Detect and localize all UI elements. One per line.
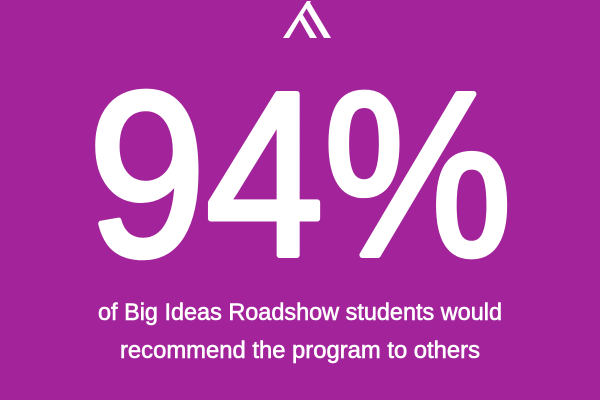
icon: logo	[283, 1, 331, 38]
caption text	[98, 299, 502, 364]
caption text: recommend the program to others	[120, 337, 480, 364]
caption text: of Big Ideas Roadshow students would	[98, 299, 502, 326]
headline statistic: 94%	[88, 43, 512, 305]
